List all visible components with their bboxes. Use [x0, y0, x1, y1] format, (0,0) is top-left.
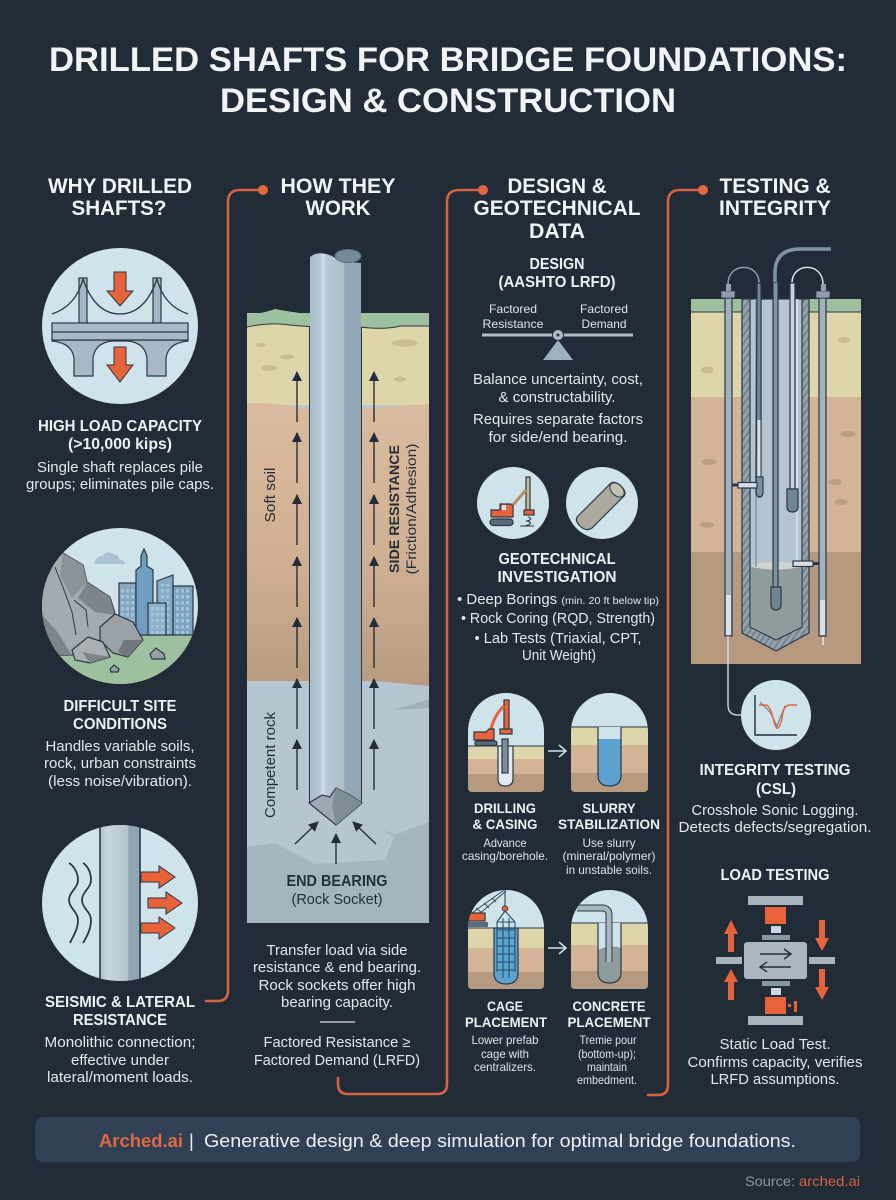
- text: load transfer explanation: bearing capacity.: [281, 995, 393, 1011]
- drawing: shaft: [309, 250, 362, 825]
- icon: rocks and city: [36, 528, 200, 690]
- access tubes and probes: [721, 249, 831, 645]
- footer banner: [35, 1117, 860, 1162]
- text: drilling and casing: [462, 800, 548, 863]
- text: static load test: Static Load Test.: [720, 1037, 830, 1053]
- text: static load test: Confirms capacity, verifies: [688, 1055, 862, 1071]
- arrows: side resistance: [297, 372, 374, 790]
- text: difficult site conditions: [44, 698, 196, 790]
- text: slurry stabilization: in unstable soils.: [566, 863, 652, 877]
- text: high load capacity: (>10,000 kips): [68, 436, 172, 453]
- panel: testing and integrity: [678, 175, 872, 1088]
- text: geotechnical investigation: [457, 551, 659, 664]
- text: load transfer explanation: Factored Demand (LRFD): [254, 1053, 420, 1069]
- text: difficult site conditions: rock, urban constraints: [44, 756, 196, 772]
- soil layers: [691, 299, 861, 664]
- panel: how they work: [247, 175, 429, 1069]
- arrow: cage to concrete: [548, 942, 566, 954]
- icon: rock core: [566, 467, 638, 539]
- heading: testing and integrity: TESTING &: [720, 175, 830, 198]
- text: slurry stabilization: SLURRY: [582, 800, 636, 816]
- text: load transfer explanation: [253, 943, 421, 1069]
- text: integrity testing: Detects defects/segregation.: [678, 820, 872, 836]
- text: high load capacity: groups; eliminates pile caps.: [26, 477, 214, 493]
- text: balance uncertainty: Requires separate factors: [473, 412, 643, 428]
- text: drilling and casing: DRILLING: [474, 800, 536, 816]
- text: cage placement: Lower prefab: [472, 1033, 539, 1047]
- footer banner: |: [189, 1130, 194, 1151]
- text: load transfer explanation: Rock sockets offer high: [258, 978, 416, 994]
- text: slurry stabilization: (mineral/polymer): [562, 849, 656, 863]
- text: seismic and lateral resistance: [44, 994, 196, 1086]
- icon: balance scale: Demand: [582, 317, 626, 331]
- heading: why drilled shafts: SHAFTS?: [72, 197, 166, 220]
- label: side resistance: (Friction/Adhesion): [403, 444, 419, 574]
- icon: balance scale: [482, 302, 633, 360]
- step illustration: drilling and casing: [468, 693, 544, 792]
- text: load transfer explanation: resistance & end bearing.: [253, 960, 421, 976]
- icon: static load test apparatus: [716, 896, 835, 1025]
- text: balance uncertainty: & constructability.: [498, 390, 616, 406]
- icon: balance scale: Factored: [580, 302, 628, 316]
- text: high load capacity: Single shaft replaces pile: [37, 460, 203, 476]
- heading: design and geotechnical data: DATA: [529, 220, 585, 243]
- text: concrete placement: (bottom-up);: [578, 1047, 636, 1061]
- connector: column 2 to column 3: [338, 185, 488, 1094]
- diagram: crosshole sonic logging: [691, 249, 861, 664]
- text: load transfer explanation: Transfer load via side: [266, 943, 408, 959]
- text: seismic and lateral resistance: Monolithic connection;: [44, 1035, 196, 1051]
- text: drilling and casing: Advance: [484, 836, 527, 850]
- text: concrete placement: PLACEMENT: [568, 1014, 651, 1030]
- label: competent rock: Competent rock: [263, 711, 279, 818]
- heading: design and geotechnical data: GEOTECHNICAL: [474, 197, 641, 220]
- text: integrity testing: INTEGRITY TESTING: [700, 762, 850, 779]
- connector: column 1 to column 2: [206, 185, 268, 1001]
- text: static load test: LRFD assumptions.: [710, 1072, 840, 1088]
- step illustration: cage placement: [468, 890, 544, 989]
- text: integrity testing: (CSL): [756, 781, 796, 798]
- source note: arched.ai: [799, 1173, 860, 1189]
- label: end bearing: [286, 873, 388, 908]
- step illustration: concrete placement: [571, 890, 648, 989]
- signal line to chart: [728, 636, 742, 715]
- icon: balance scale: Resistance: [482, 317, 544, 331]
- text: cage placement: CAGE: [487, 998, 523, 1014]
- heading: why drilled shafts: WHY DRILLED: [48, 175, 192, 198]
- shaft casing and concrete: [742, 299, 809, 651]
- icon: bridge with load arrows: [42, 248, 198, 404]
- icon: CSL signal chart: [741, 680, 811, 750]
- text: difficult site conditions: DIFFICULT SITE: [64, 698, 176, 715]
- text: drilling and casing: casing/borehole.: [462, 849, 548, 863]
- arrows: end bearing: [295, 822, 376, 864]
- title: [49, 41, 847, 120]
- panel: design and geotechnical data: [457, 175, 660, 1087]
- step illustration: slurry stabilization: [571, 693, 648, 792]
- text: geotechnical investigation: GEOTECHNICAL: [498, 551, 616, 568]
- text: cage placement: cage with: [481, 1047, 529, 1061]
- text: balance uncertainty: for side/end bearing.: [488, 430, 628, 446]
- icon: drilling rig: [477, 467, 549, 539]
- text: geotechnical investigation: • Deep Borings (min. 20 ft below tip): [457, 592, 659, 608]
- title: DESIGN & CONSTRUCTION: [220, 82, 676, 120]
- label: end bearing: (Rock Socket): [292, 892, 382, 908]
- text: integrity testing: [678, 762, 872, 836]
- text: static load test: [688, 1037, 862, 1088]
- diagram: soil profile with shaft: [247, 309, 429, 923]
- text: high load capacity: [26, 418, 214, 493]
- connector: column 3 to column 4: [648, 185, 708, 1095]
- heading: why drilled shafts: [48, 175, 192, 220]
- text: concrete placement: embedment.: [577, 1073, 637, 1087]
- text: design AASHTO LRFD: DESIGN: [530, 256, 584, 273]
- text: design AASHTO LRFD: [498, 256, 616, 291]
- text: seismic and lateral resistance: lateral/moment loads.: [47, 1070, 193, 1086]
- heading: how they work: WORK: [306, 197, 370, 220]
- text: cage placement: PLACEMENT: [465, 1014, 547, 1030]
- text: geotechnical investigation: Unit Weight): [522, 648, 596, 664]
- text: seismic and lateral resistance: RESISTANCE: [73, 1012, 167, 1029]
- text: concrete placement: maintain: [587, 1060, 627, 1074]
- heading: how they work: [280, 175, 396, 220]
- text: balance uncertainty: Balance uncertainty, cost,: [473, 372, 643, 388]
- text: design AASHTO LRFD: (AASHTO LRFD): [498, 274, 616, 291]
- heading: how they work: HOW THEY: [280, 175, 396, 198]
- icon: seismic waves and lateral arrows: [42, 822, 198, 984]
- title: DRILLED SHAFTS FOR BRIDGE FOUNDATIONS:: [49, 41, 847, 79]
- heading: testing and integrity: [719, 175, 831, 220]
- footer banner: Arched.ai: [99, 1130, 183, 1151]
- text: geotechnical investigation: • Lab Tests (Triaxial, CPT,: [474, 631, 642, 647]
- label: side resistance: [386, 444, 419, 574]
- label: soft soil: Soft soil: [263, 468, 279, 522]
- text: geotechnical investigation: INVESTIGATION: [498, 569, 616, 586]
- text: drilling and casing: & CASING: [472, 816, 538, 832]
- text: load transfer explanation: Factored Resistance ≥: [264, 1035, 411, 1051]
- icon: balance scale: Factored: [489, 302, 537, 316]
- text: difficult site conditions: (less noise/vibration).: [48, 774, 192, 790]
- heading: testing and integrity: INTEGRITY: [719, 197, 831, 220]
- source note: [745, 1173, 860, 1189]
- text: seismic and lateral resistance: SEISMIC & LATERAL: [45, 994, 195, 1011]
- heading: design and geotechnical data: [474, 175, 641, 243]
- text: cage placement: centralizers.: [474, 1060, 536, 1074]
- text: cage placement: [465, 998, 547, 1074]
- text: difficult site conditions: Handles variable soils,: [46, 739, 194, 755]
- label: end bearing: END BEARING: [286, 873, 388, 890]
- text: integrity testing: Crosshole Sonic Logging.: [692, 803, 858, 819]
- text: high load capacity: HIGH LOAD CAPACITY: [38, 418, 203, 435]
- text: geotechnical investigation: • Rock Coring (RQD, Strength): [461, 611, 655, 627]
- text: slurry stabilization: STABILIZATION: [558, 816, 660, 832]
- text: concrete placement: [568, 998, 651, 1087]
- arrow: drilling to slurry: [548, 745, 566, 757]
- source note: Source:: [745, 1173, 795, 1189]
- text: balance uncertainty: [473, 372, 643, 446]
- text: concrete placement: Tremie pour: [580, 1033, 636, 1047]
- text: difficult site conditions: CONDITIONS: [73, 716, 167, 733]
- text: slurry stabilization: Use slurry: [582, 836, 636, 850]
- panel: why drilled shafts: [26, 175, 214, 1086]
- text: seismic and lateral resistance: effective under: [71, 1053, 169, 1069]
- label: side resistance: SIDE RESISTANCE: [386, 445, 402, 573]
- heading: design and geotechnical data: DESIGN &: [508, 175, 606, 198]
- heading: load testing: LOAD TESTING: [720, 867, 830, 884]
- footer banner: Generative design & deep simulation for optimal bridge foundations.: [204, 1130, 796, 1151]
- text: concrete placement: CONCRETE: [572, 998, 646, 1014]
- text: slurry stabilization: [558, 800, 660, 877]
